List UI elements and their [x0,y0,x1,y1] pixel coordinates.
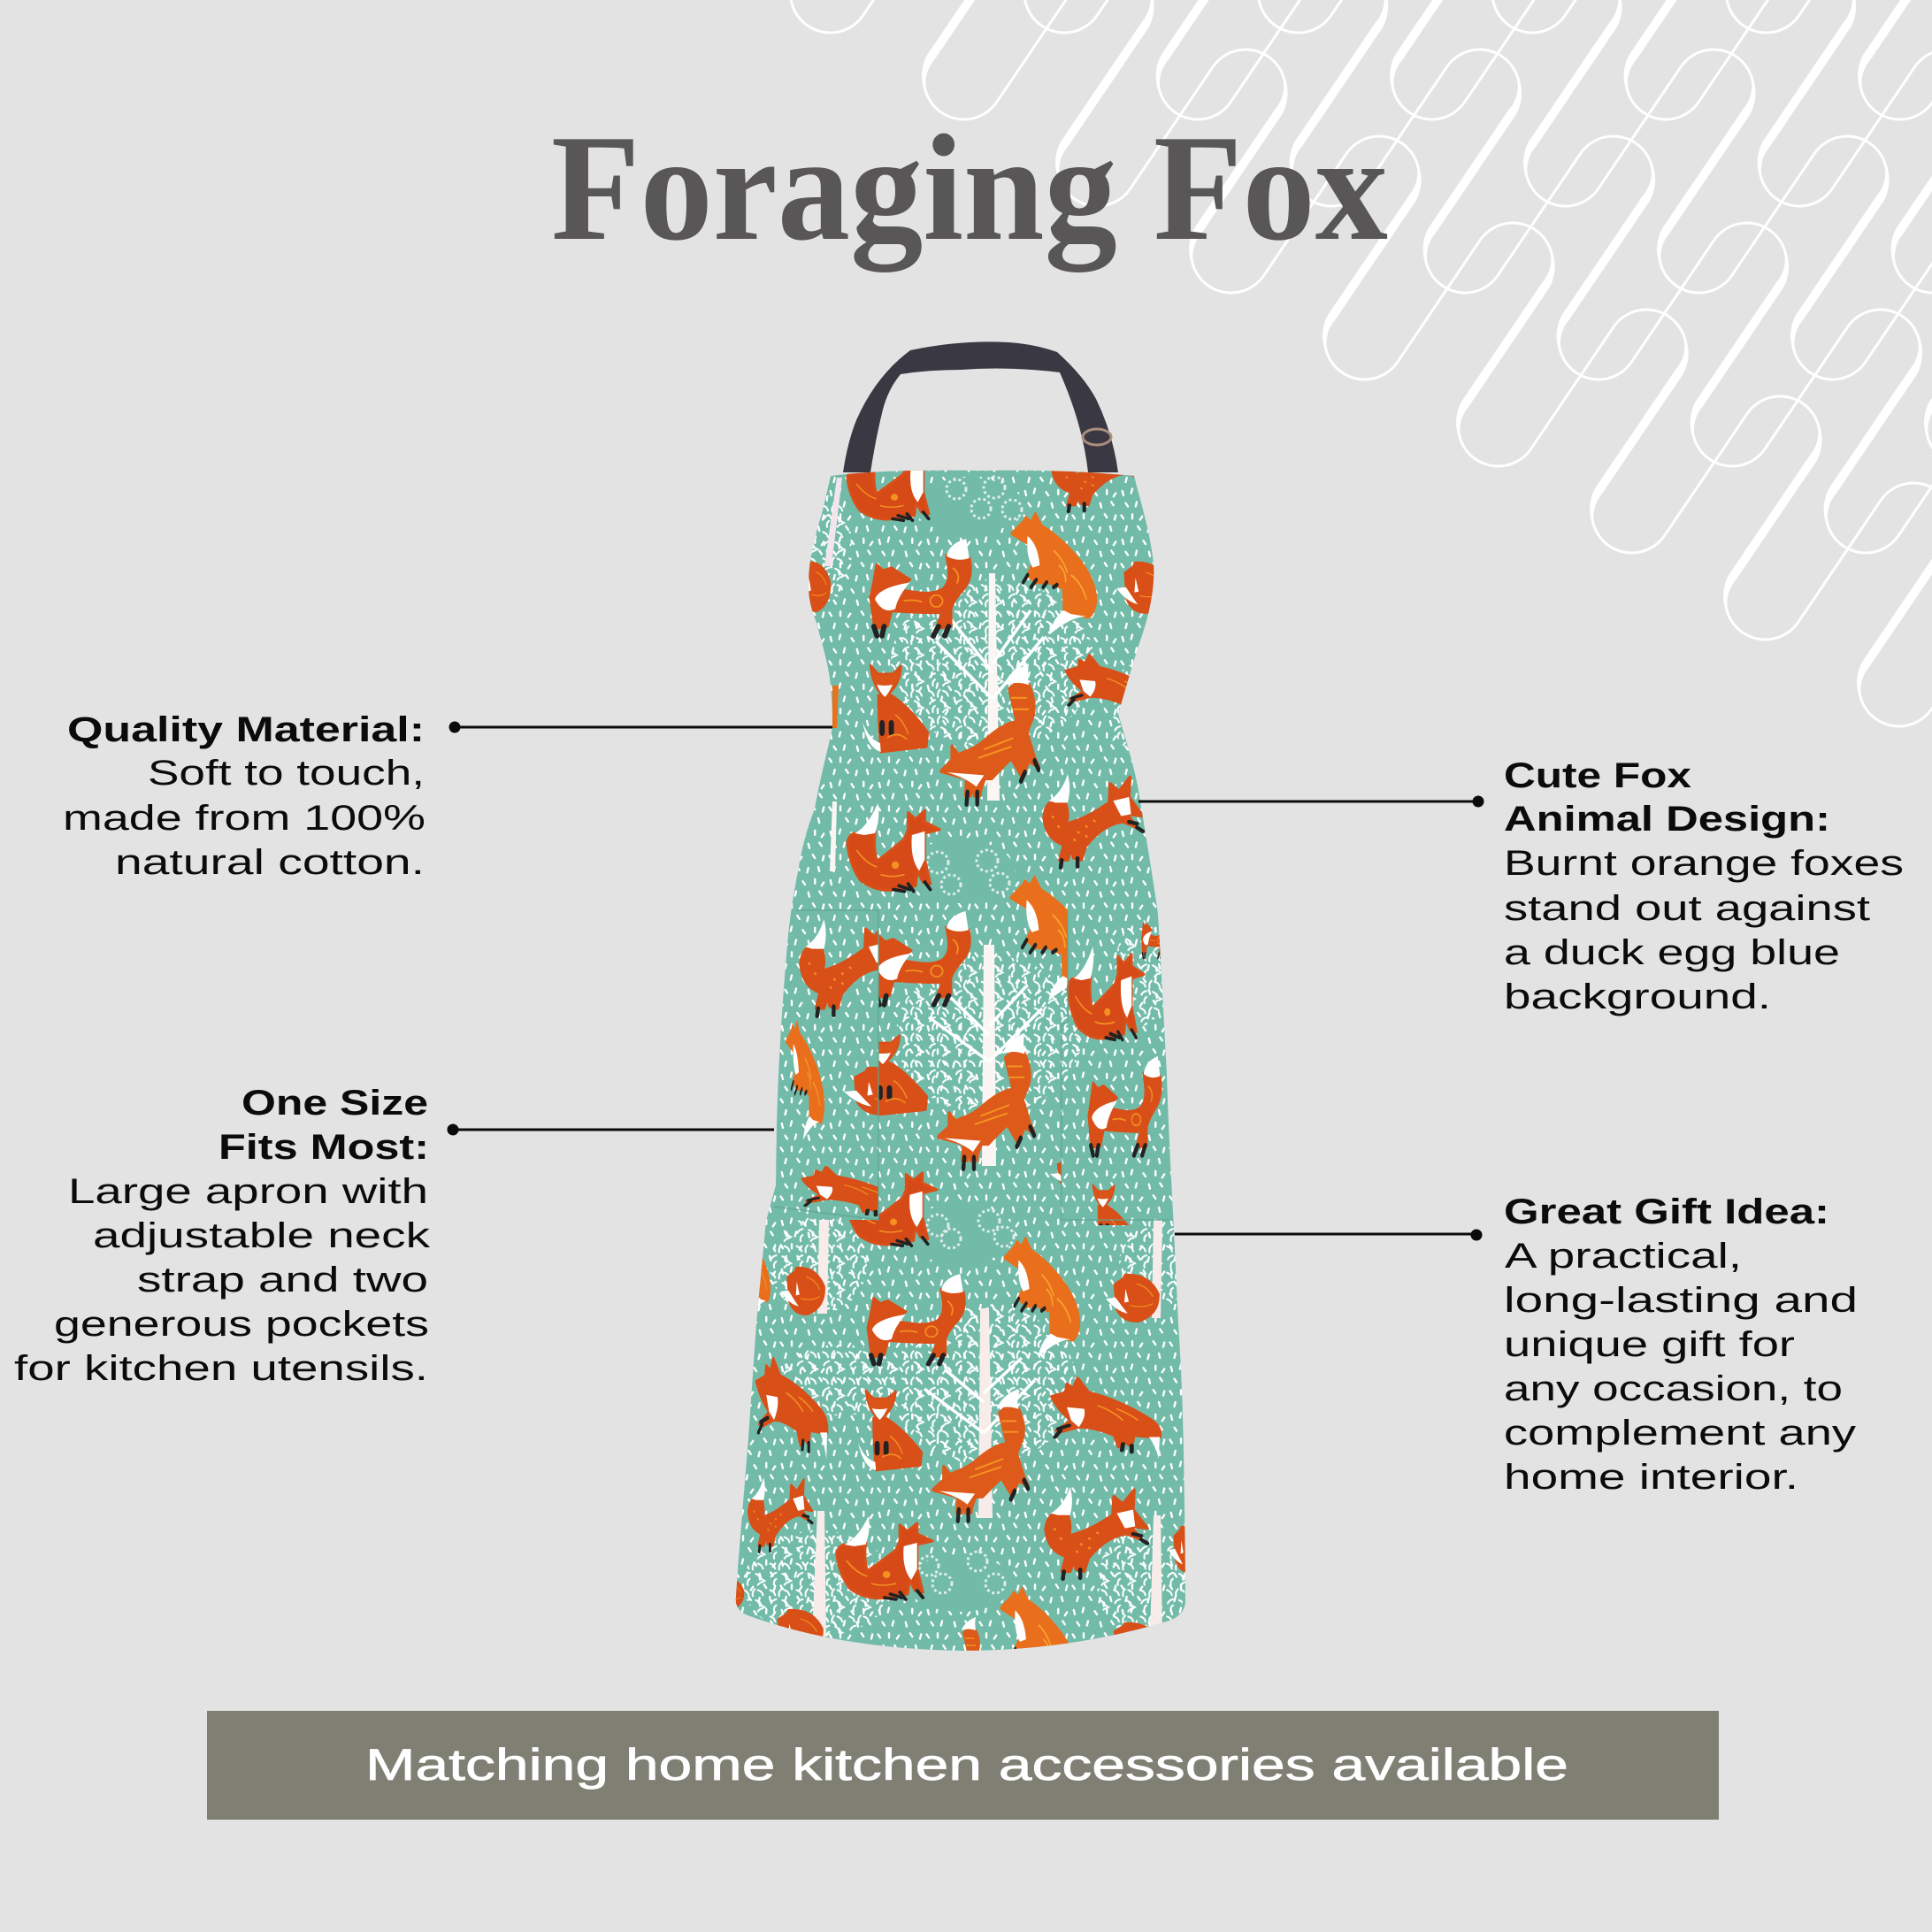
fox: running lower [933,1389,1028,1521]
orange fold at left waist [832,686,839,728]
fox: left edge strip [757,1258,771,1307]
fox: top right cut legs [1051,471,1134,513]
leader line [453,1129,774,1131]
text: Soft to touch, [148,754,425,793]
fox: left edge cut bottom [717,1578,744,1609]
fox: standing upper [870,539,970,636]
tree trunks and branches [812,478,1162,1637]
fox: right edge curled [1116,561,1154,614]
fox: bright sitter upper [1012,514,1096,635]
fox: bright sitter mid cut by pocket [1009,876,1068,1001]
text: long-lasting and [1504,1281,1858,1320]
fox: running mid [939,1033,1034,1169]
fox: right pocket edge [1141,922,1161,959]
text: a duck egg blue [1504,933,1840,972]
apron product illustration [736,341,1185,1651]
callout: cute fox animal design [1138,756,1904,1016]
callout: quality material [63,710,832,882]
text: Cute Fox [1504,756,1691,795]
callout: one size fits most [14,1084,774,1388]
pocket seams [774,910,1173,1220]
fox: front sitting upper [862,665,928,752]
leader dot [1472,796,1484,807]
fox: curled lower right [1106,1274,1160,1322]
fox: standing mid cut by pocket [873,911,970,1005]
text [1504,756,1904,1016]
fox: bottom running tail [920,1617,982,1704]
fox: bright sitter lower [1005,1238,1079,1358]
fox: right pocket front sitting [1087,1184,1129,1225]
text: unique gift for [1504,1325,1795,1364]
fox: left pocket leaping [799,919,878,1018]
text: for kitchen utensils. [14,1349,428,1388]
leader dot [448,1123,458,1136]
decorative paperclip line pattern [788,0,1932,751]
fox: front sitting lower [858,1391,922,1470]
text: background. [1504,978,1771,1016]
title: Foraging Fox [551,104,1388,272]
text: Burnt orange foxes [1504,844,1904,883]
fox: left pocket bright edge [786,1023,824,1140]
text: natural cotton. [115,843,425,882]
fox: left pocket crouching [801,1166,878,1217]
fox: right pocket standing [1089,1056,1161,1155]
text: complement any [1504,1414,1856,1453]
text [1504,1192,1858,1497]
fox: crouching lower left [756,1359,827,1460]
leader line [1175,1233,1476,1235]
banner background [207,1711,1719,1820]
small white dash texture [725,460,1194,1663]
text: home interior. [1504,1458,1798,1497]
text: adjustable neck [93,1216,431,1255]
fox: small curled at seam [1050,1162,1062,1184]
foxes [717,433,1203,1708]
fox: top cut sitting [846,471,931,522]
text [14,1084,431,1388]
fox: sitting mid [847,803,939,892]
fox: running upper [941,663,1039,804]
leafy texture areas [743,495,1190,1637]
open dandelion areas [905,478,1024,1612]
callout: great gift idea [1175,1192,1858,1497]
banner text: Matching home kitchen accessories available [365,1740,1568,1790]
text: any occasion, to [1504,1369,1843,1408]
text: One Size [242,1084,428,1123]
fox: curled lower left [780,1267,825,1315]
cloth base [725,460,1194,1663]
text: strap and two [137,1261,428,1300]
leader line [455,725,832,729]
leader dot [449,722,460,732]
fox: sitting lower mid [847,1166,937,1246]
text: made from 100% [63,799,426,838]
fox: bottom curled left [770,1609,824,1657]
text: generous pockets [54,1305,429,1344]
fox: bottom curled right [1106,1622,1160,1664]
banner: matching accessories [207,1711,1719,1820]
fox: leaping bottom right [1046,1487,1147,1579]
adjuster ring [1083,429,1111,445]
dandelion flowers [919,477,1022,1593]
fox: crouching lower right [1052,1378,1160,1459]
text: Fits Most: [218,1128,429,1167]
leader line [1138,800,1478,803]
fox: right edge cut [1169,1526,1203,1573]
apron body [736,471,1185,1651]
fox: right pocket sitting [1068,947,1144,1039]
fox: standing lower [868,1274,964,1364]
text: Large apron with [68,1172,428,1211]
fox: left pocket curled [844,1067,878,1116]
fox: sitting bottom [837,1516,932,1599]
fox: bottom bright sitter [1001,1589,1077,1708]
text: A practical, [1505,1237,1742,1276]
neck strap [843,341,1118,472]
text: Animal Design: [1504,800,1830,839]
fox: leaping upper [1044,774,1143,868]
fox: front sitting mid [878,1034,929,1116]
text: Great Gift Idea: [1504,1192,1829,1231]
text [63,710,426,882]
leader dot [1470,1230,1483,1240]
text: stand out against [1504,889,1870,928]
fox: crouching right edge [1064,654,1130,707]
fox: left edge curled [809,561,832,612]
fox: leaping bottom left [748,1477,812,1552]
text: Quality Material: [67,710,425,749]
